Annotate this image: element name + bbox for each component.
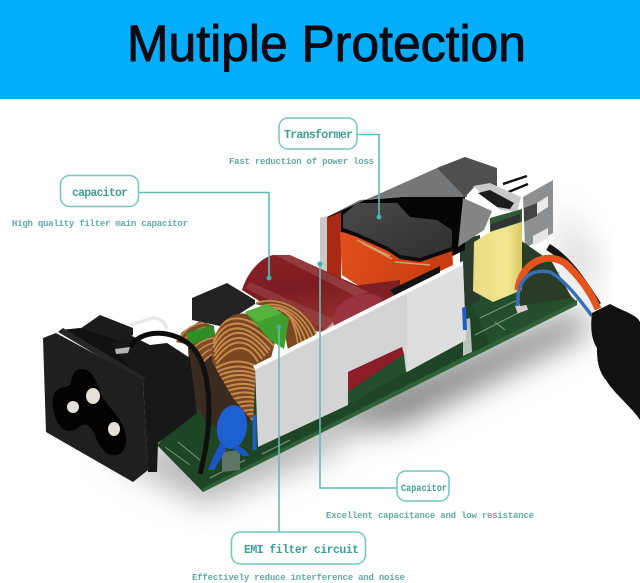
grey shield inner fold: [437, 157, 497, 197]
label text: capacitor: [72, 187, 128, 200]
black shield interior: [327, 192, 465, 262]
connector line: [276, 324, 282, 532]
rear copper winding: [255, 300, 316, 350]
label box: [279, 118, 357, 149]
black part behind shield: [390, 266, 440, 298]
yellow component: [473, 209, 522, 302]
label text: EMI filter circuit: [244, 544, 359, 557]
metal bracket: [473, 183, 521, 212]
transformer black cap: [343, 203, 452, 262]
connector line: [318, 262, 397, 488]
grey shield flap: [458, 198, 492, 247]
label box: [397, 471, 449, 501]
header banner: [0, 0, 640, 99]
description: High quality filter main capacitor: [12, 219, 188, 229]
label text: Capacitor: [401, 483, 447, 495]
power socket: [43, 315, 209, 482]
label text: Transformer: [284, 129, 353, 142]
orange transformer coil: [320, 212, 453, 300]
circuit board: [157, 245, 577, 492]
grey shield top: [327, 157, 467, 217]
connector line: [138, 192, 272, 280]
white wire: [130, 318, 167, 329]
callout: EMI filter circuit: [192, 324, 405, 583]
black relay: [192, 283, 255, 326]
description: Excellent capacitance and low resistance: [326, 511, 534, 521]
label box: [60, 176, 138, 206]
blue ceramic capacitor: [208, 403, 250, 472]
white metal shield: [252, 261, 467, 450]
label box: [232, 532, 366, 564]
green toroid core: [245, 304, 289, 349]
drop shadow: [110, 200, 600, 505]
dark backing behind windings: [188, 335, 250, 440]
callout: Capacitor: [318, 262, 534, 521]
red capacitor: [242, 255, 400, 340]
small copper toroid: [176, 321, 216, 362]
description: Fast reduction of power loss: [229, 157, 374, 167]
callout: capacitor: [12, 176, 272, 280]
power cable: [518, 247, 640, 420]
USB back plate: [503, 176, 553, 248]
main copper winding: [212, 314, 275, 422]
title: Mutiple Protection: [127, 15, 526, 72]
power supply assembly: [43, 157, 640, 492]
description: Effectively reduce interference and noise: [192, 573, 405, 583]
connector line: [357, 134, 382, 220]
dark backing behind yellow part: [460, 235, 480, 310]
callout: Transformer: [229, 118, 382, 220]
